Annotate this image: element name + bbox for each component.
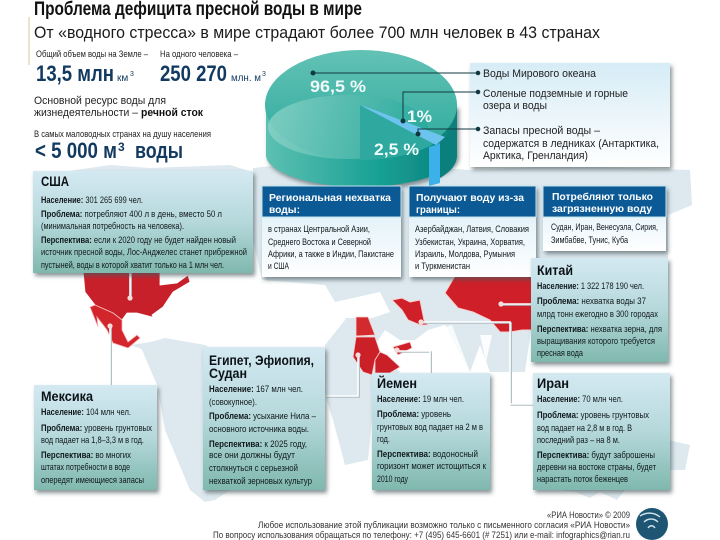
panel: Iran: Проблема: уровень грунтовых: [537, 410, 649, 421]
panel: receive water from abroad: Узбекистан, Украина, Хорватия,: [415, 237, 525, 248]
panel: Mexico: Перспектива: во многих: [41, 450, 131, 461]
panel: consume only polluted water: Потребляют только: [552, 191, 653, 203]
text block: total water volume: [36, 49, 149, 86]
footer credits: Любое использование этой публикации возможно только с письменного согласия «РИА Новости»: [258, 520, 630, 530]
panel: Iran: вод падает на 2,8 м в год. В: [537, 423, 632, 434]
panel: pie legend: Воды Мирового океана: [483, 68, 597, 80]
panel: USA: пустыней, воды в которой хватит только на 1 млн чел.: [41, 260, 224, 271]
text block: total water volume: 3: [130, 71, 134, 78]
text block: scarce countries: В самых маловодных странах на душу населения: [34, 129, 211, 140]
country: Ethiopia: [375, 352, 400, 373]
panel: receive water from abroad: границы:: [416, 204, 460, 216]
panel: USA: Проблема: потребляют 400 л в день, вместо 50 л: [41, 209, 222, 220]
text block: main resource: [34, 95, 203, 119]
text block: water per person: [160, 49, 266, 86]
panel: China: млрд тонн ежегодно в 300 городах: [537, 309, 658, 320]
panel: Iran: деревни на востоке страны, будет: [537, 462, 657, 473]
panel: China: [531, 258, 668, 362]
panel: regional shortage: и США: [268, 261, 289, 272]
label: 1%: 1%: [407, 107, 432, 126]
panel: regional shortage: Африки, а также в Индии, Пакистане: [268, 249, 394, 260]
text block: scarce countries: 3: [118, 140, 125, 154]
text block: water per person: млн. м: [231, 73, 261, 84]
panel: Yemen: год.: [377, 434, 390, 445]
panel: regional shortage: Среднего Востока и Северной: [268, 237, 371, 248]
country: Yemen: [393, 342, 412, 355]
footer credits: «РИА Новости» © 2009: [547, 510, 630, 520]
panel: Mexico: [34, 385, 157, 490]
country: Sudan: [353, 337, 380, 375]
panel: Egypt, Ethiopia, Sudan: столкнуться с серьезной: [209, 463, 298, 474]
panel: pie legend: Запасы пресной воды –: [483, 125, 601, 137]
panel: Yemen: грунтовых вод падает на 2 м в: [377, 422, 483, 433]
panel: China: пресная вода: [537, 348, 584, 359]
panel: USA: Перспектива: если к 2020 году не будет найден новый: [41, 235, 236, 246]
panel: Yemen: 2010 году: [377, 474, 408, 485]
panel: Iran: Перспектива: будут заброшены: [537, 450, 655, 461]
panel: Mexico: штатах потребности в воде: [41, 462, 130, 473]
text block: total water volume: 13,5 млн: [36, 61, 114, 86]
panel: Egypt, Ethiopia, Sudan: Египет, Эфиопия,: [209, 353, 314, 368]
panel: USA: (минимальная потребность на человека).: [41, 221, 184, 232]
text block: main resource: Основной ресурс воды для: [34, 95, 166, 107]
panel: Mexico: опередят имеющиеся запасы: [41, 475, 144, 486]
panel: China: Китай: [537, 263, 573, 278]
country: USA: [83, 270, 190, 325]
panel: Egypt, Ethiopia, Sudan: Перспектива: к 2025 году,: [209, 439, 307, 450]
panel: receive water from abroad: [409, 186, 536, 277]
text block: total water volume: Общий объем воды на Земле –: [36, 49, 149, 60]
text block: scarce countries: < 5 000 м: [35, 138, 117, 163]
pie chart: water distribution: [265, 50, 457, 187]
subtitle: От «водного стресса» в мире страдают более 700 млн человек в 43 странах: [34, 23, 600, 42]
country: China: [445, 270, 533, 332]
panel: Egypt, Ethiopia, Sudan: все они должны будут: [209, 450, 296, 461]
text block: scarce countries: воды: [135, 138, 183, 163]
panel: Egypt, Ethiopia, Sudan: Проблема: усыхание Нила –: [209, 411, 317, 422]
text block: total water volume: км: [117, 73, 128, 84]
panel: consume only polluted water: загрязненную воду: [552, 203, 652, 215]
text block: water per person: 250 270: [160, 61, 227, 86]
text block: water per person: На одного человека –: [160, 49, 239, 60]
panel: regional shortage: [262, 186, 401, 277]
panel: Iran: Население: 70 млн чел.: [537, 394, 623, 405]
panel: consume only polluted water: Зимбабве, Тунис, Куба: [551, 235, 629, 246]
panel: receive water from abroad: Получают воду из-за: [416, 192, 524, 204]
panel: pie legend: озера и воды: [483, 100, 547, 112]
panel: China: Перспектива: нехватка зерна, для: [537, 324, 662, 335]
panel: regional shortage: Региональная нехватка: [269, 192, 391, 204]
label: 96,5 %: 96,5 %: [310, 77, 366, 96]
pie leader lines: [311, 71, 480, 136]
panel: Yemen: Население: 19 млн чел.: [377, 394, 464, 405]
panel: USA: источник пресной воды, Лос-Анджелес станет прибрежной: [41, 247, 247, 258]
panel: China: Население: 1 322 178 190 чел.: [537, 281, 644, 292]
panel: Egypt, Ethiopia, Sudan: нехваткой зерновых культур: [209, 476, 312, 487]
panel: Yemen: Перспектива: водоносный: [377, 449, 478, 460]
panel: China: выращивания которого требуется: [537, 336, 655, 347]
text block: water per person: 3: [262, 71, 266, 78]
panel: Mexico: Мексика: [41, 389, 93, 404]
panel: pie legend: Соленые подземные и горные: [483, 88, 628, 100]
panel: pie legend: содержатся в ледниках (Антарктика,: [483, 138, 659, 150]
panel: Mexico: вод падает на 1,8–3,3 м в год.: [41, 435, 144, 446]
panel: Mexico: Население: 104 млн чел.: [41, 407, 131, 418]
panel: regional shortage: воды:: [269, 204, 300, 216]
panel: Yemen: [372, 373, 490, 490]
panel: Iran: Иран: [537, 376, 569, 391]
panel: USA: [33, 171, 253, 273]
panel: Egypt, Ethiopia, Sudan: основного источника воды.: [209, 424, 309, 435]
text block: main resource: речной сток: [141, 107, 203, 119]
text block: main resource: жизнедеятельности –: [34, 107, 139, 119]
label: 2,5 %: 2,5 %: [374, 140, 419, 159]
panel: Iran: [533, 373, 670, 490]
footer credits: По вопросу использования обращаться по телефону: +7 (495) 645-6601 (# 7251) или e-mail: infographics@rian.ru: [213, 530, 630, 540]
panel: Iran: последний раз – на 8 м.: [537, 435, 620, 446]
panel: pie legend: [470, 63, 670, 167]
panel: USA: США: [41, 174, 69, 189]
panel: receive water from abroad: и Туркменистан: [415, 261, 470, 272]
panel: receive water from abroad: Израиль, Молдова, Румыния: [415, 249, 515, 260]
panel: Egypt, Ethiopia, Sudan: Население: 167 млн чел.: [209, 384, 303, 395]
country: Egypt: [356, 317, 375, 336]
panel: China: Проблема: нехватка воды 37: [537, 296, 646, 307]
panel: Mexico: Проблема: уровень грунтовых: [41, 423, 152, 434]
icon: RIA Novosti logo: [636, 508, 668, 540]
panel: pie legend: Арктика, Гренландия): [483, 150, 588, 162]
world map: [60, 160, 692, 502]
panel: Egypt, Ethiopia, Sudan: (совокупное).: [209, 397, 257, 408]
text block: scarce countries: [34, 129, 211, 163]
panel: Iran: нарастать поток беженцев: [537, 474, 628, 485]
panel: receive water from abroad: Азербайджан, Латвия, Словакия: [415, 224, 529, 235]
panel: consume only polluted water: Судан, Иран, Венесуэла, Сирия,: [551, 222, 658, 233]
panel: Egypt, Ethiopia, Sudan: Судан: [209, 366, 247, 381]
country: Mexico: [90, 305, 140, 348]
panel: Yemen: горизонт может истощиться к: [377, 461, 487, 472]
panel: Yemen: Проблема: уровень: [377, 409, 451, 420]
panel: Egypt, Ethiopia, Sudan: [203, 347, 325, 490]
panel: consume only polluted water: [543, 186, 666, 251]
panel: USA: Население: 301 265 699 чел.: [41, 195, 143, 206]
panel: regional shortage: в странах Центральной Азии,: [268, 224, 370, 235]
country: Iran: [392, 298, 428, 325]
footer credits: [213, 510, 630, 540]
panel: Yemen: Йемен: [377, 376, 417, 391]
